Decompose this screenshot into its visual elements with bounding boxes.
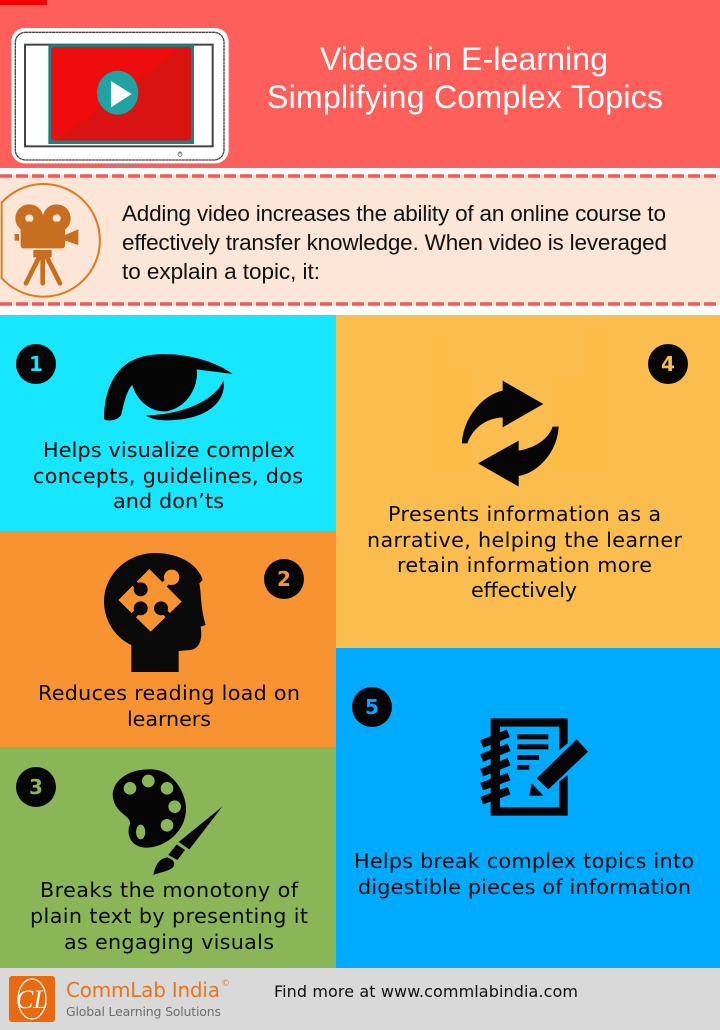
panel 3: monotony	[0, 747, 336, 968]
logo: CommLab India: CL	[16, 985, 48, 1014]
number badge 1: 1	[29, 352, 43, 376]
icon: palette and brush	[113, 769, 222, 875]
panel: introduction	[0, 175, 720, 305]
panel 5: digestible pieces	[336, 648, 720, 968]
text 5: Helps break complex topics into	[354, 849, 694, 873]
text 4: narrative, helping the learner	[367, 528, 682, 552]
text 1	[33, 438, 303, 513]
text 4: Presents information as a	[388, 502, 661, 526]
number badge 3: 3	[29, 775, 43, 799]
text 3: Breaks the monotony of	[40, 878, 299, 902]
text 3: plain text by presenting it	[30, 904, 308, 928]
number badge 2	[264, 559, 304, 599]
title	[267, 41, 663, 115]
text 5	[354, 849, 694, 899]
icon: head with puzzle piece	[104, 553, 206, 672]
logo: CommLab India: CommLab India	[66, 978, 220, 1002]
number badge 2: 2	[277, 567, 291, 591]
panel 2: reading load	[0, 531, 336, 747]
footer	[0, 968, 720, 1030]
text 2	[38, 681, 300, 731]
icon: eye	[104, 354, 233, 421]
icon: notebook and pencil	[482, 718, 588, 816]
icon: circular arrows	[462, 381, 559, 487]
text 2: Reduces reading load on	[38, 681, 300, 705]
number badge 5	[352, 687, 392, 727]
title: Simplifying Complex Topics	[267, 79, 663, 115]
icon: video monitor	[11, 28, 229, 165]
number badge 5: 5	[365, 695, 379, 719]
number badge 4: 4	[661, 352, 675, 376]
intro text: Adding video increases the ability of an online course to	[122, 201, 666, 226]
text 1: and don’ts	[113, 489, 224, 513]
intro text: effectively transfer knowledge. When video is leveraged	[122, 230, 667, 255]
text 4: retain information more	[397, 553, 652, 577]
text 3	[30, 878, 308, 954]
intro text: to explain a topic, it:	[122, 259, 320, 284]
number badge 3	[16, 767, 56, 807]
logo: CommLab India: ©	[221, 979, 230, 989]
header panel	[0, 0, 720, 168]
intro text	[122, 201, 667, 284]
number badge 1	[16, 344, 56, 384]
text 1: Helps visualize complex	[43, 438, 295, 462]
text 3: as engaging visuals	[64, 930, 274, 954]
logo: CommLab India: Global Learning Solutions	[66, 1004, 221, 1019]
logo: CommLab India	[9, 976, 230, 1022]
footer link text: Find more at www.commlabindia.com	[274, 982, 578, 1001]
text 2: learners	[127, 707, 211, 731]
panel 4: narrative	[336, 315, 720, 648]
text 4	[367, 502, 682, 602]
text 1: concepts, guidelines, dos	[33, 464, 303, 488]
number badge 4	[648, 344, 688, 384]
icon: film camera	[2, 184, 100, 297]
title: Videos in E-learning	[320, 41, 608, 77]
text 4: effectively	[471, 578, 577, 602]
panel 1: visualize	[0, 315, 336, 531]
text 5: digestible pieces of information	[358, 875, 691, 899]
